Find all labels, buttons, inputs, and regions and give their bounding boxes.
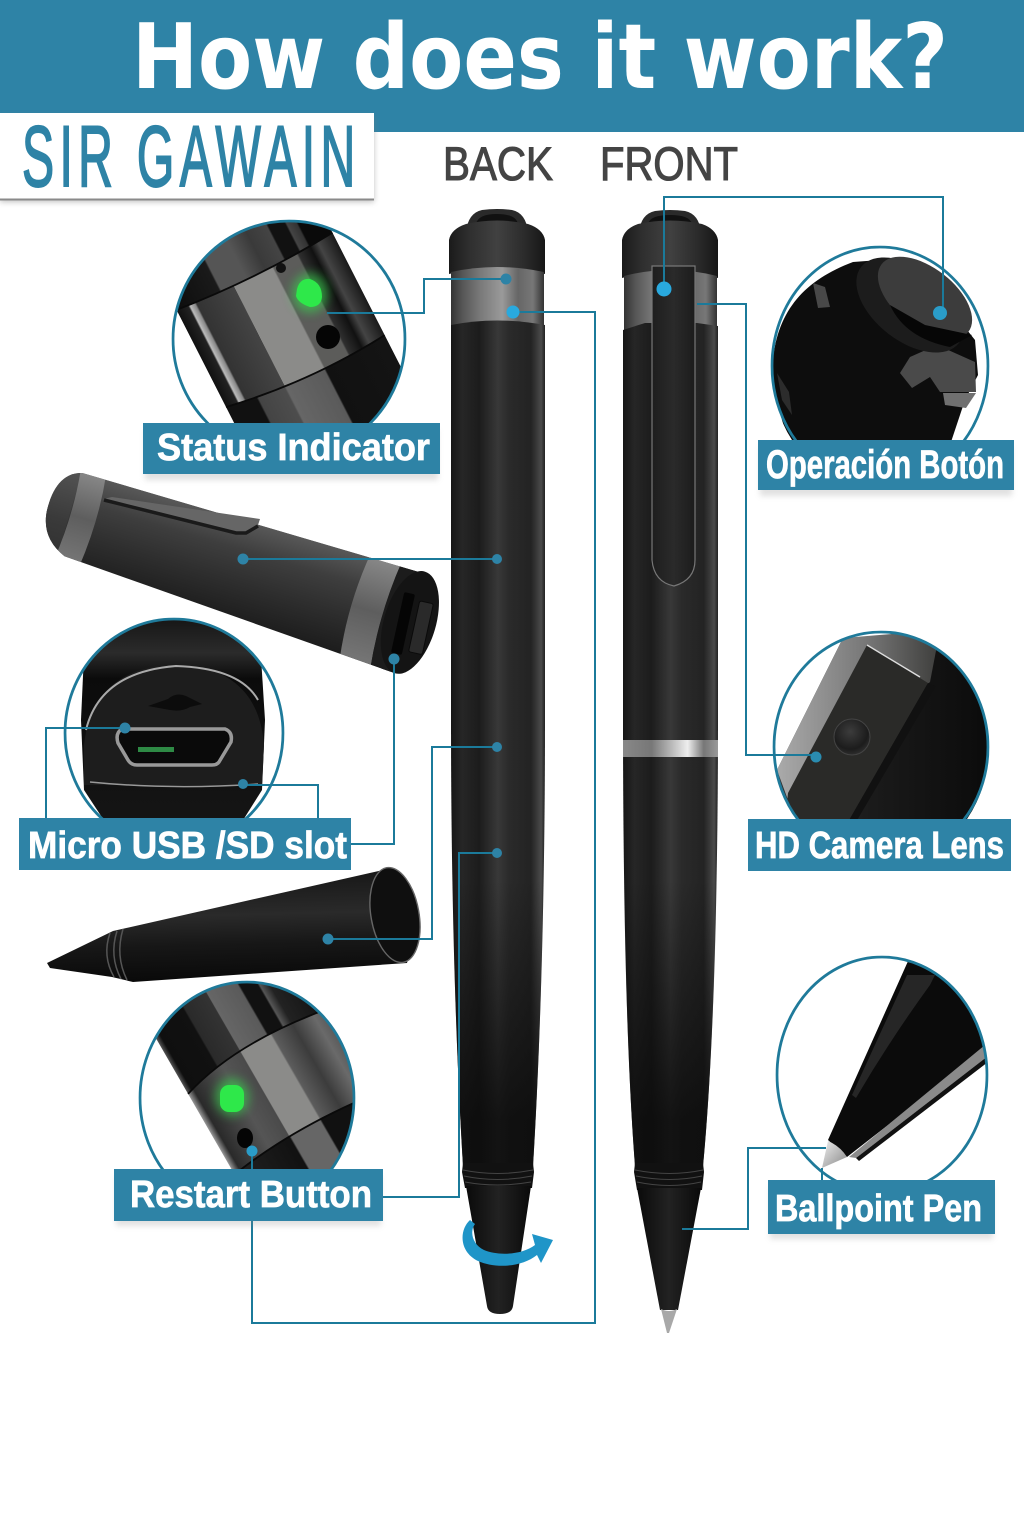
restart hole [237, 1128, 253, 1148]
label: status indicator: Status Indicator [157, 427, 430, 469]
panel: operation button detail [770, 246, 990, 440]
usb port [117, 729, 231, 765]
pocket clip [652, 266, 695, 586]
panel: micro usb detail [64, 618, 284, 818]
status LED [215, 1078, 249, 1116]
hole [316, 325, 340, 349]
panel: restart button detail [138, 980, 356, 1169]
label: micro usb sd slot: Micro USB /SD slot [28, 825, 347, 867]
back label: BACK [443, 137, 553, 190]
brand name: SIR GAWAIN [22, 108, 361, 205]
front label: FRONT [600, 137, 738, 190]
label: restart button: Restart Button [130, 1174, 372, 1216]
brand logo box [0, 108, 374, 205]
rotation arrow [463, 1220, 553, 1266]
label: restart button [114, 1169, 383, 1226]
back pen [449, 209, 545, 1314]
front pen [622, 210, 718, 1333]
usb icon [148, 695, 202, 711]
camera lens [834, 719, 870, 755]
panel: status indicator detail [172, 220, 406, 423]
label: status indicator [143, 423, 440, 480]
cone tip part [47, 864, 427, 982]
status LED [292, 273, 328, 313]
connector dots [120, 274, 947, 1156]
label: ballpoint pen [768, 1180, 995, 1239]
side pen clip [103, 497, 260, 533]
label: ballpoint pen: Ballpoint Pen [775, 1188, 982, 1230]
panel: ballpoint pen detail [776, 956, 988, 1180]
panel: hd camera lens detail [772, 630, 990, 819]
side pen body [46, 473, 439, 674]
connector lines [46, 197, 943, 1323]
center ring [623, 740, 718, 757]
header banner [0, 0, 1024, 132]
